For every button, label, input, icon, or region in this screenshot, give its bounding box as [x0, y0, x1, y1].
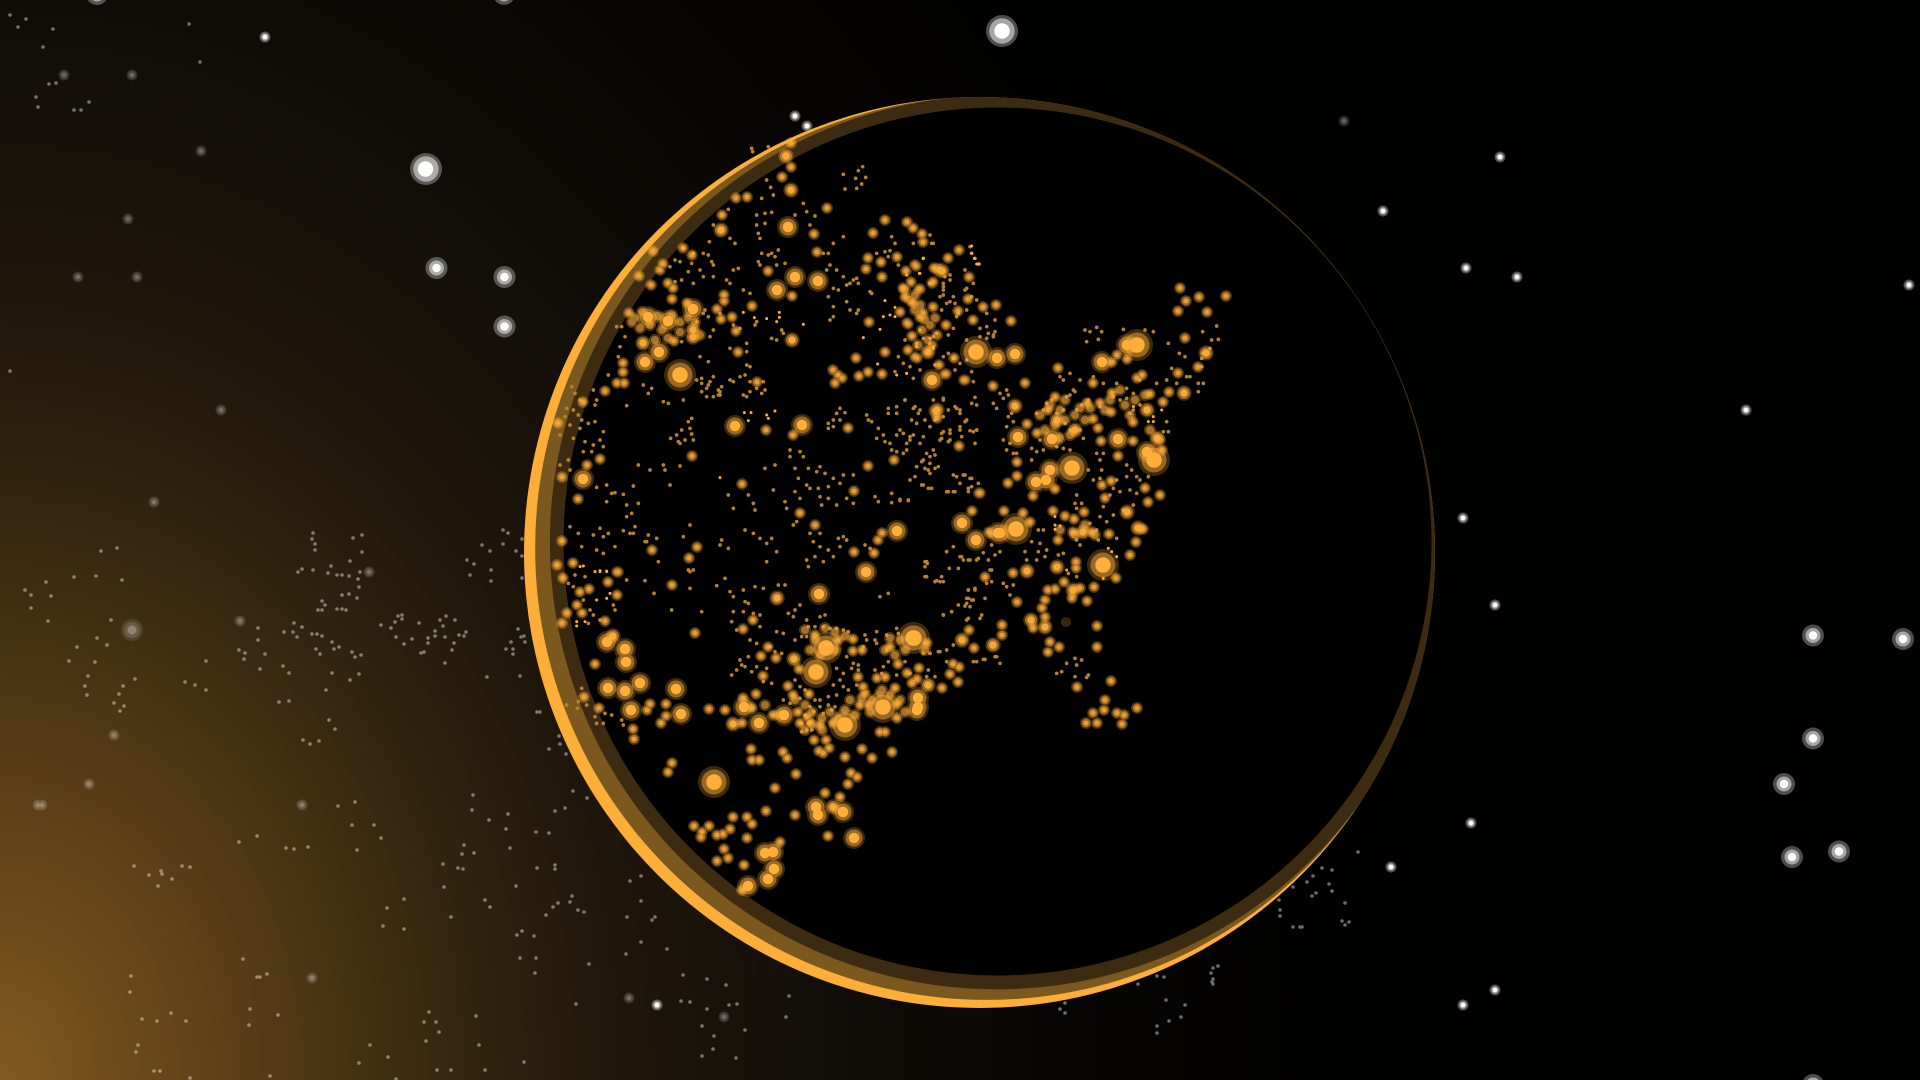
faint extinguished point [1061, 617, 1071, 627]
bubbles: medium points [613, 156, 1206, 807]
brown shadow disc [535, 96, 1439, 1000]
grey background star dust [10, 15, 1358, 1079]
dark shadow disc [550, 96, 1444, 989]
bright tiny dots [577, 246, 1162, 626]
tiny dots [560, 147, 1218, 732]
bubbles: extra large points [680, 345, 1154, 782]
bubbles: large points [583, 227, 1147, 886]
tiny dots: lower left quadrant [567, 567, 997, 732]
tiny dots: upper left quadrant [560, 147, 995, 570]
black globe face [564, 108, 1432, 976]
large dim star [121, 619, 143, 641]
dim stars [38, 75, 1344, 1017]
dense cluster glow [632, 290, 1160, 730]
bubbles: small points [557, 143, 1226, 890]
crescent globe [524, 96, 1444, 1008]
largest stars [410, 15, 1018, 185]
tiny dots: right quadrant [900, 243, 1218, 677]
outer orange disc [524, 97, 1435, 1008]
